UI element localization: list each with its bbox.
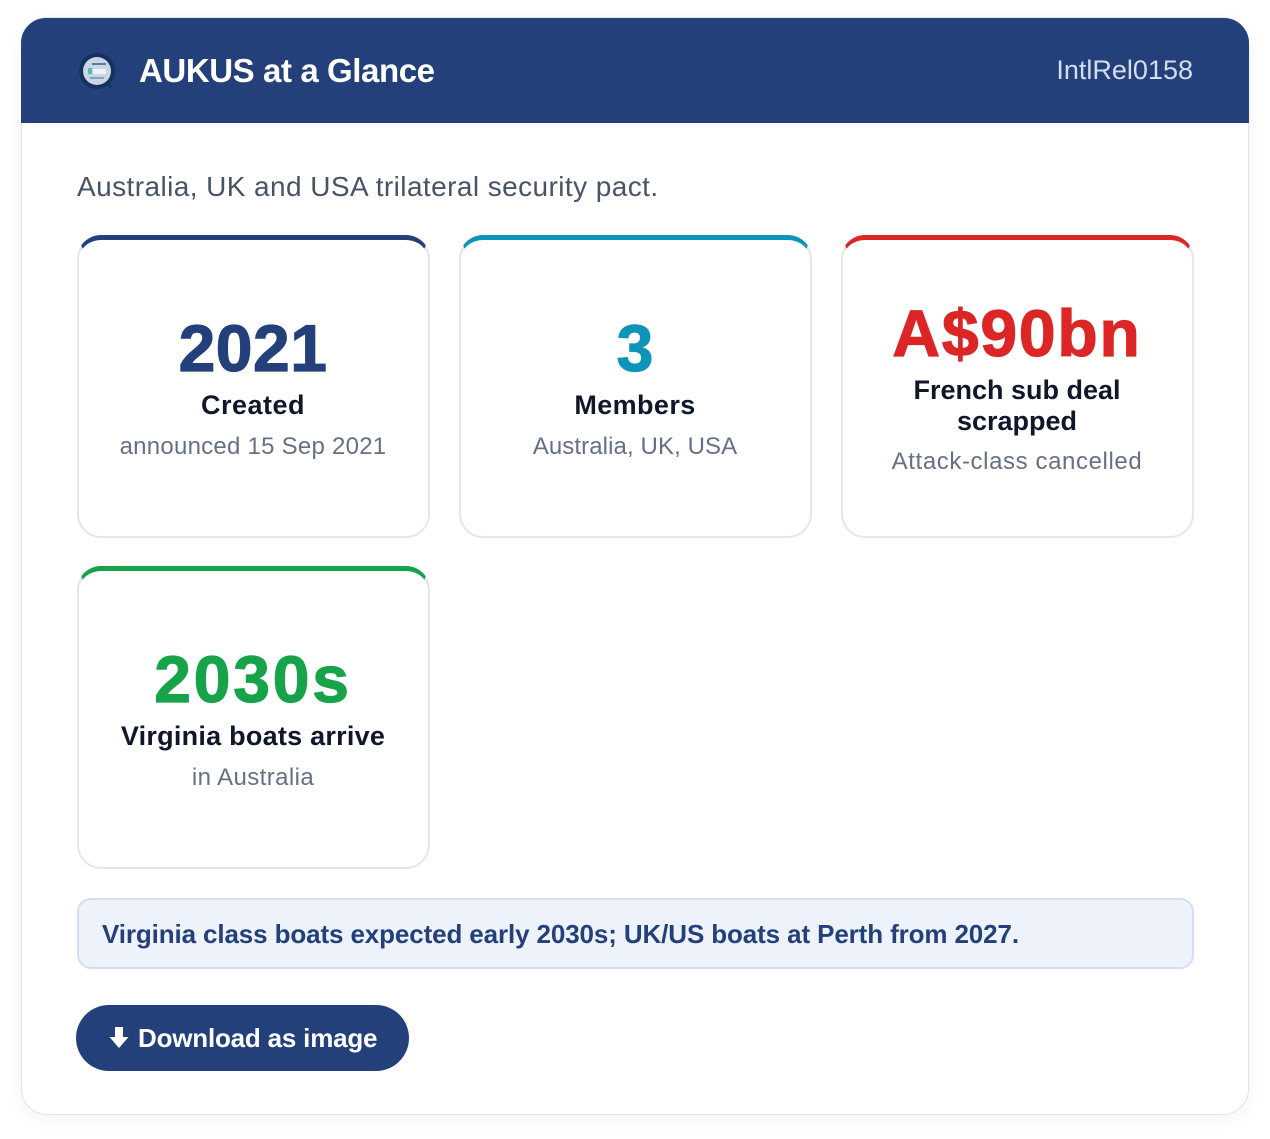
button label: Download as image [138,1023,377,1053]
note: Australia, UK, USA [533,433,737,460]
title: AUKUS at a Glance [139,52,435,89]
label: Virginia boats arrive [121,721,385,751]
label: scrapped [957,406,1077,436]
stat: 2021 [179,311,327,385]
panel: deal [840,235,1194,538]
label [913,375,1121,436]
label: French sub deal [913,375,1121,405]
stat: 2030s [154,642,352,716]
intro text: Australia, UK and USA trilateral security pact. [77,171,659,202]
label: Created [201,390,305,420]
callout text: Virginia class boats expected early 2030s; UK/US boats at Perth from 2027. [102,918,1019,948]
callout [76,898,1194,968]
label: Members [574,390,696,420]
download button [76,1005,409,1071]
panel: members [458,235,812,538]
note: in Australia [192,764,314,791]
stat: 3 [617,311,653,385]
icon: down arrow [110,1027,128,1048]
note: announced 15 Sep 2021 [120,433,386,460]
code: IntlRel0158 [1056,55,1193,85]
stat: A$90bn [892,296,1142,370]
icon: logo [79,53,115,89]
panel: created [76,235,430,538]
panel: boats [76,566,430,869]
note: Attack-class cancelled [892,448,1142,475]
header bar [21,18,1249,123]
